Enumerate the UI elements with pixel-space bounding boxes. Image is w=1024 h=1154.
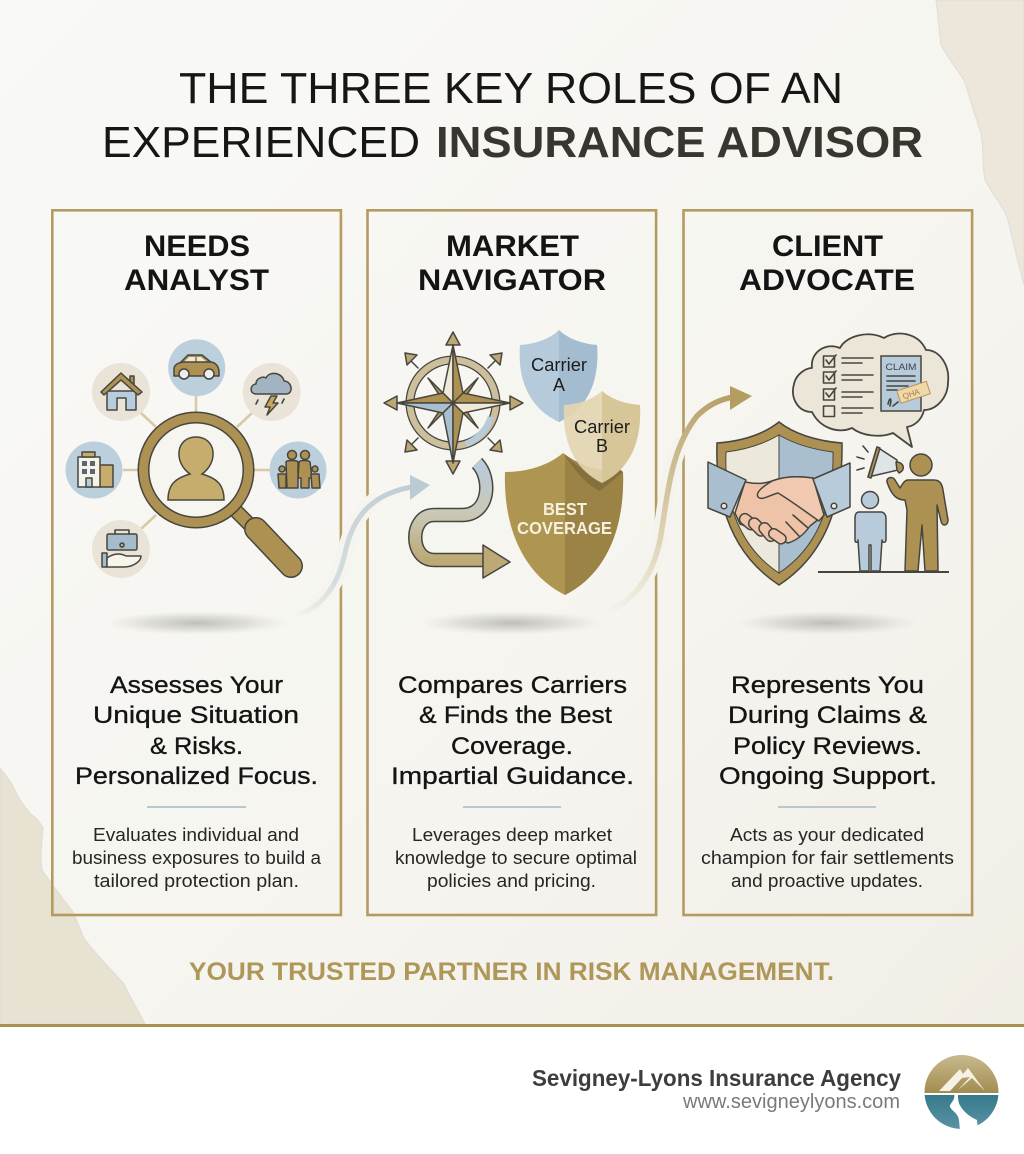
shield: carrier a (520, 330, 597, 422)
heading: market navigator (418, 230, 606, 297)
body: needs analyst summary: & Risks. (150, 733, 243, 760)
body: client advocate summary: Represents You (731, 672, 924, 699)
icon: magnifying glass with person (144, 418, 291, 566)
icon: agency logo (924, 1055, 998, 1131)
shield: carrier b (564, 391, 640, 483)
icon: speech cloud with claim form: CLAIM (886, 362, 917, 373)
heading: market navigator: NAVIGATOR (418, 264, 606, 297)
panel: needs analyst (52, 210, 341, 915)
footer band (0, 1024, 1024, 1129)
body: market navigator summary: Impartial Guidance. (391, 763, 634, 790)
shield: best coverage: BEST (543, 499, 587, 519)
detail: needs analyst: business exposures to build a (72, 847, 322, 868)
agency name and website: Sevigney-Lyons Insurance Agency (532, 1065, 901, 1091)
icon: speech cloud with claim form (793, 334, 948, 447)
icon: briefcase in hand (92, 520, 150, 578)
icon: shield (717, 422, 842, 585)
heading: client advocate: ADVOCATE (739, 264, 915, 297)
body: client advocate summary: Policy Reviews. (733, 733, 922, 760)
detail: needs analyst (72, 824, 322, 891)
body: market navigator summary: & Finds the Best (419, 702, 612, 729)
arrow: market navigator to client advocate (600, 386, 752, 614)
icon: storm cloud (243, 363, 301, 421)
body: market navigator summary (391, 672, 634, 790)
icon: office building (66, 442, 122, 498)
icon: car (168, 339, 225, 396)
shield: best coverage (505, 453, 623, 595)
detail: client advocate: and proactive updates. (731, 870, 923, 891)
icon: handshake (708, 462, 850, 546)
body: needs analyst summary: Assesses Your (110, 672, 283, 699)
heading: client advocate (739, 230, 915, 297)
icon: winding route arrow (415, 463, 510, 578)
torn paper: bottom left (0, 768, 145, 1024)
heading: needs analyst (124, 230, 269, 297)
body: needs analyst summary: Unique Situation (93, 702, 299, 729)
torn paper: top right (936, 0, 1024, 285)
body: client advocate summary: During Claims & (728, 702, 927, 729)
detail: client advocate: champion for fair settlements (701, 847, 954, 868)
illustration: magnifier and risk icons (66, 339, 326, 578)
body: market navigator summary: Coverage. (451, 733, 573, 760)
ground shadow (420, 611, 604, 635)
icon: standing client (855, 492, 886, 571)
icon: family (270, 442, 326, 498)
detail: market navigator: knowledge to secure optimal (395, 847, 637, 868)
body: client advocate summary: Ongoing Support. (719, 763, 937, 790)
detail: market navigator: policies and pricing. (427, 870, 596, 891)
detail: needs analyst: Evaluates individual and (93, 824, 299, 845)
detail: client advocate (701, 824, 954, 891)
detail: market navigator: Leverages deep market (412, 824, 612, 845)
icon: compass (384, 332, 523, 474)
panel: market navigator (368, 210, 656, 915)
tagline: YOUR TRUSTED PARTNER IN RISK MANAGEMENT. (189, 958, 834, 986)
detail: client advocate: Acts as your dedicated (730, 824, 924, 845)
title (102, 64, 923, 167)
agency name and website: www.sevigneylyons.com (682, 1091, 900, 1113)
heading: market navigator: MARKET (446, 230, 579, 263)
shield: carrier a: A (553, 375, 565, 395)
shield: carrier b: B (596, 436, 608, 456)
panel: client advocate (684, 210, 972, 915)
ground shadow (735, 611, 919, 635)
body: needs analyst summary (75, 672, 318, 790)
detail: market navigator (395, 824, 637, 891)
icon: house (92, 363, 150, 421)
icon: speech cloud with claim form: QHA (902, 387, 922, 401)
illustration: compass, road and shields (384, 330, 640, 595)
icon: advocate with megaphone (857, 446, 948, 571)
arrow: needs analyst to market navigator (295, 475, 430, 616)
body: market navigator summary: Compares Carriers (398, 672, 627, 699)
agency name and website (532, 1065, 901, 1113)
heading: needs analyst: NEEDS (144, 230, 250, 263)
title: INSURANCE ADVISOR (436, 118, 923, 167)
title: EXPERIENCED (102, 118, 420, 167)
ground shadow (105, 611, 289, 635)
shield: carrier a: Carrier (531, 355, 587, 375)
heading: needs analyst: ANALYST (124, 264, 269, 297)
body: needs analyst summary: Personalized Focus. (75, 763, 318, 790)
illustration: shield handshake, claim bubble and advocate (708, 334, 949, 585)
body: client advocate summary (719, 672, 937, 790)
shield: best coverage: COVERAGE (517, 518, 612, 538)
shield: carrier b: Carrier (574, 417, 630, 437)
heading: client advocate: CLIENT (772, 230, 883, 263)
detail: needs analyst: tailored protection plan. (94, 870, 299, 891)
title: THE THREE KEY ROLES OF AN (179, 64, 843, 113)
